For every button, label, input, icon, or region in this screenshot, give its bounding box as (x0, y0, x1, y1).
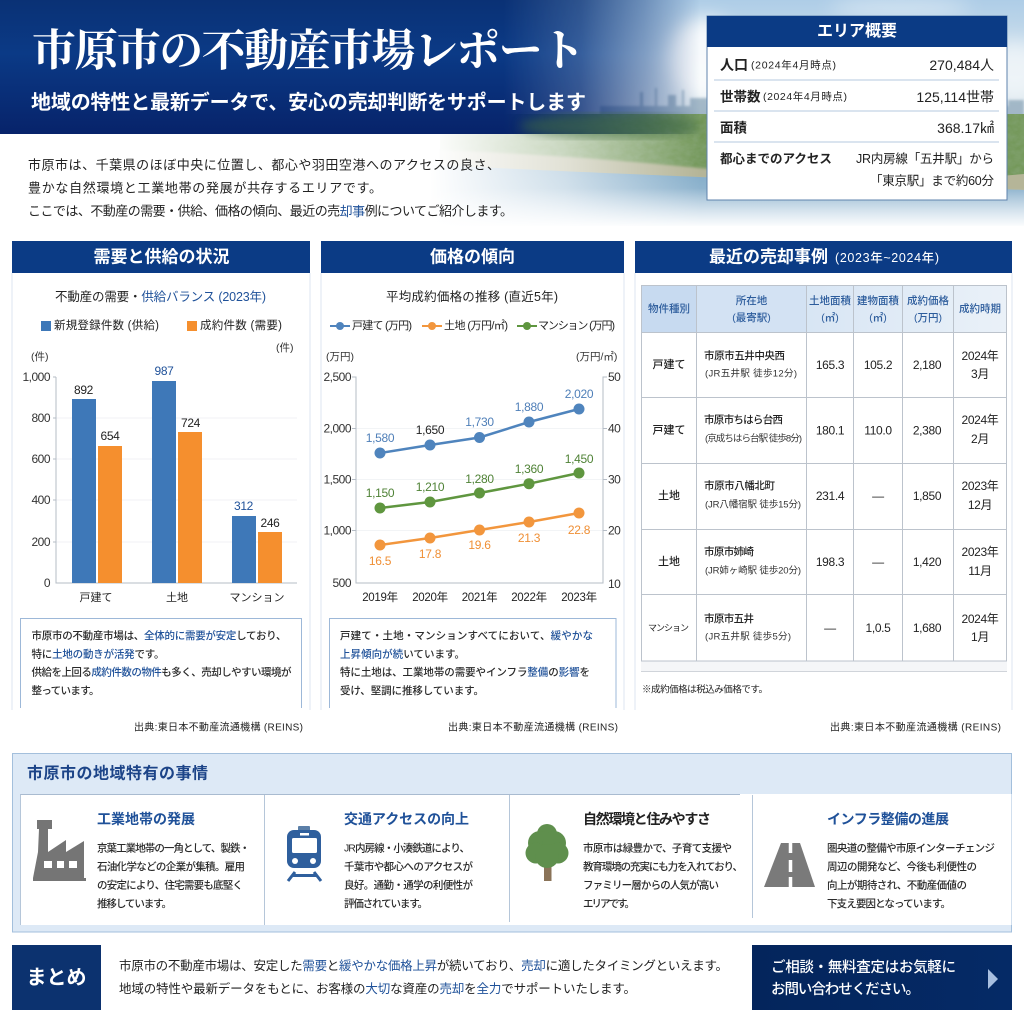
row 2: 2月 (971, 432, 989, 446)
bar chart: 724 (181, 416, 201, 430)
line chart: (万円) (326, 351, 354, 363)
table: (万円) (914, 312, 942, 324)
table: 物件種別 (648, 302, 690, 315)
row 3: 1,850 (913, 489, 942, 503)
row 5: 1,0.5 (866, 621, 891, 635)
title: 市原市の不動産市場レポート (32, 26, 585, 76)
line chart: 2022年 (511, 590, 547, 604)
panel: area overview: エリア概要 (817, 22, 897, 40)
line chart: 21.3 (518, 531, 541, 545)
legend: マンション (万円) (538, 320, 615, 332)
row 4: 土地 (658, 554, 680, 568)
panel: price trends (321, 241, 624, 734)
source: 出典:東日本不動産流通機構 (REINS) (448, 720, 618, 734)
icon: factory (33, 820, 86, 881)
row 4: 2023年 (962, 545, 999, 559)
legend (41, 318, 282, 332)
card: transit access: 千葉市や都心へのアクセスが (344, 860, 474, 873)
row 1: 市原市五井中央西 (704, 349, 785, 362)
table: 所在地 (736, 294, 768, 307)
row 4: 1,420 (913, 555, 942, 569)
card: natural environment: 教育環境の充実にも力を入れており、 (583, 860, 743, 873)
line chart: 1,210 (416, 480, 445, 494)
row 2: 市原市ちはら台西 (704, 413, 783, 426)
intro text: 市原市は、千葉県のほぼ中央に位置し、都心や羽田空港へのアクセスの良さ、 (28, 158, 500, 172)
bar chart: (件) (276, 342, 294, 354)
line chart: 10 (608, 577, 621, 591)
line chart: 30 (608, 472, 621, 486)
card: infrastructure (764, 811, 995, 910)
row 2: (京成ちはら台駅 徒歩8分) (705, 432, 802, 444)
bar chart: 戸建て (80, 591, 112, 604)
table (641, 285, 1007, 672)
row 3: 2023年 (962, 479, 999, 493)
summary text: 市原市の不動産市場は、安定した需要と緩やかな価格上昇が続いており、売却に適したタイミングといえます。 (119, 958, 728, 973)
row 2: 戸建て (652, 422, 686, 436)
table: (最寄駅) (732, 312, 771, 324)
bar chart: 200 (31, 535, 51, 549)
bar chart: 987 (155, 364, 174, 378)
bar chart: 400 (31, 493, 51, 507)
card: natural environment: エリアです。 (583, 898, 635, 910)
line chart: 2019年 (362, 590, 398, 604)
line chart: 17.8 (419, 547, 442, 561)
callout (20, 618, 302, 708)
card: infrastructure: 圏央道の整備や市原インターチェンジ (827, 842, 995, 854)
summary text: 地域の特性や最新データをもとに、お客様の大切な資産の売却を全力でサポートいたします。 (119, 981, 636, 996)
panel: area overview: JR内房線「五井駅」から (856, 151, 994, 166)
callout: 市原市の不動産市場は、全体的に需要が安定しており、 (32, 629, 286, 642)
table: 建物面積 (857, 294, 899, 307)
line chart: (万円/㎡) (576, 351, 617, 363)
summary text (119, 958, 728, 996)
panel: area overview: 人口 (720, 57, 748, 73)
heading: 需要と供給の状況 (94, 248, 230, 266)
row 2: 180.1 (816, 424, 845, 438)
line chart: 1,580 (366, 431, 395, 445)
legend: 戸建て (万円) (352, 319, 412, 332)
panel: area overview: 125,114世帯 (916, 89, 994, 105)
line chart: 2,000 (323, 422, 352, 436)
row 5: 1,680 (913, 621, 942, 635)
row 2 (652, 413, 999, 446)
card: infrastructure: インフラ整備の進展 (827, 811, 949, 827)
callout (330, 618, 616, 708)
icon: road (764, 843, 815, 887)
bar chart: 654 (101, 429, 120, 443)
bar chart: 600 (31, 452, 51, 466)
row 1: 3月 (971, 367, 989, 381)
card: industrial zone: 工業地帯の発展 (97, 811, 195, 827)
chart title: 平均成約価格の推移 (直近5年) (386, 289, 558, 304)
row 1 (652, 349, 999, 381)
card: infrastructure: 周辺の開発など、今後も利便性の (827, 860, 977, 873)
bar chart: 土地 (166, 591, 188, 604)
panel: supply and demand (12, 241, 310, 734)
row 1: 165.3 (816, 358, 845, 372)
row 4: 11月 (968, 564, 992, 578)
source: 出典:東日本不動産流通機構 (REINS) (830, 720, 1001, 734)
card: transit access: JR内房線・小湊鉄道により、 (344, 842, 470, 854)
table: 土地面積 (809, 294, 851, 307)
row 5: 1月 (971, 630, 989, 644)
panel: area overview: 368.17㎢ (937, 120, 994, 136)
row 2: 2024年 (962, 413, 999, 427)
bar chart: 0 (44, 576, 51, 590)
row 3: 市原市八幡北町 (704, 479, 776, 492)
card: natural environment (526, 811, 743, 910)
call to action: お問い合わせください。 (771, 981, 920, 998)
arrow (988, 969, 998, 989)
heading: 価格の傾向 (430, 248, 515, 266)
card: industrial zone (33, 811, 250, 910)
row 1: 2024年 (962, 349, 999, 363)
bar chart: 312 (234, 499, 254, 513)
row 5: マンション (648, 623, 689, 633)
line chart: 1,280 (465, 472, 494, 486)
panel: area overview: 「東京駅」まで約60分 (870, 173, 994, 188)
panel: regional circumstances (12, 754, 1012, 932)
row 5: 2024年 (962, 612, 999, 626)
row 5: (JR五井駅 徒歩5分) (705, 630, 791, 642)
row 4: — (872, 555, 884, 569)
card: industrial zone: 石油化学などの企業が集積。雇用 (97, 860, 245, 873)
row 3: 土地 (658, 488, 680, 502)
card: natural environment: 自然環境と住みやすさ (583, 811, 711, 827)
row 1: 105.2 (864, 358, 893, 372)
line chart: 20 (608, 524, 621, 538)
table: 成約価格 (907, 294, 949, 307)
panel: recent sales (635, 241, 1012, 734)
row 4 (658, 545, 999, 578)
row 1: (JR五井駅 徒歩12分) (705, 368, 797, 380)
card: industrial zone: 京葉工業地帯の一角として、製鉄・ (97, 842, 250, 854)
source: 出典:東日本不動産流通機構 (REINS) (134, 720, 303, 734)
row 3 (658, 479, 999, 512)
callout: 戸建て・土地・マンションすべてにおいて、緩やかな (340, 629, 593, 642)
card: infrastructure: 向上が期待され、不動産価値の (827, 878, 967, 892)
intro text: ここでは、不動産の需要・供給、価格の傾向、最近の売却事例についてご紹介します。 (28, 204, 513, 218)
line chart: 2,500 (323, 370, 352, 384)
intro text: 豊かな自然環境と工業地帯の発展が共存するエリアです。 (28, 180, 382, 196)
legend: 土地 (万円/㎡) (444, 319, 508, 332)
line chart: 1,650 (416, 423, 445, 437)
icon: train (287, 826, 321, 881)
line chart: 2023年 (561, 590, 597, 604)
panel: area overview: (2024年4月時点) (763, 90, 847, 103)
header banner (0, 0, 700, 146)
row 4: (JR姉ヶ崎駅 徒歩20分) (705, 564, 801, 576)
row 5: — (824, 621, 836, 635)
line chart: 1,730 (465, 415, 494, 429)
bar chart: (件) (31, 351, 48, 363)
table: 成約時期 (959, 302, 1001, 315)
line chart: 40 (608, 422, 621, 436)
panel: area overview: 世帯数 (720, 90, 761, 104)
card: transit access: 良好。通勤・通学の利便性が (344, 878, 474, 892)
call to action: ご相談・無料査定はお気軽に (771, 958, 956, 976)
row 4: 市原市姉崎 (704, 545, 754, 558)
bar chart: マンション (230, 592, 284, 604)
panel: area overview: 都心までのアクセス (720, 151, 832, 166)
row 5: 市原市五井 (704, 612, 754, 625)
bar chart: 892 (74, 383, 94, 397)
card: natural environment: 市原市は緑豊かで、子育て支援や (583, 842, 732, 854)
line chart: 19.6 (468, 538, 491, 552)
callout: 特に土地の動きが活発です。 (32, 648, 164, 660)
call to action (752, 945, 1012, 1010)
panel: area overview (707, 16, 1007, 200)
bar chart (22, 342, 297, 604)
panel: area overview: (2024年4月時点) (751, 58, 836, 72)
legend (330, 319, 615, 332)
line chart: 2020年 (412, 590, 448, 604)
line chart (323, 351, 621, 604)
line chart: 16.5 (369, 554, 392, 568)
row 1: 戸建て (652, 357, 686, 371)
row 4: 198.3 (816, 555, 845, 569)
heading (709, 246, 939, 266)
table note: ※成約価格は税込み価格です。 (642, 684, 768, 696)
row 3: (JR八幡宿駅 徒歩15分) (705, 498, 801, 510)
row 1: 2,180 (913, 358, 942, 372)
summary label (12, 945, 101, 1010)
line chart: 2021年 (462, 590, 497, 604)
legend: 成約件数 (需要) (200, 318, 282, 332)
line chart: 1,880 (515, 400, 544, 414)
callout: 受け、堅調に推移しています。 (340, 684, 484, 697)
line chart: 50 (608, 370, 621, 384)
subtitle: 地域の特性と最新データで、安心の売却判断をサポートします (31, 90, 586, 114)
line chart: 1,500 (323, 472, 352, 486)
bar chart: 1,000 (22, 370, 51, 384)
callout: 整っています。 (32, 684, 100, 697)
row 3: 231.4 (816, 489, 845, 503)
callout: 特に土地は、工業地帯の需要やインフラ整備の影響を (340, 666, 590, 678)
icon: tree (526, 824, 568, 881)
bar chart: 800 (31, 411, 51, 425)
row 3: 12月 (968, 498, 992, 512)
card: transit access (287, 811, 474, 910)
legend: 新規登録件数 (供給) (54, 318, 159, 332)
row 5 (648, 612, 999, 644)
callout: 供給を上回る成約件数の物件も多く、売却しやすい環境が (32, 666, 292, 678)
line chart: 1,360 (515, 462, 544, 476)
line chart: 1,450 (565, 452, 594, 466)
line chart: 500 (332, 576, 352, 590)
table: (㎡) (821, 312, 839, 324)
bar chart: 246 (261, 516, 280, 530)
row 2: 110.0 (864, 424, 892, 438)
callout: 上昇傾向が続いています。 (340, 648, 465, 660)
line chart: 22.8 (568, 523, 591, 537)
line chart: 1,150 (366, 486, 395, 500)
card: transit access: 交通アクセスの向上 (344, 811, 469, 827)
card: infrastructure: 下支え要因となっています。 (827, 897, 951, 910)
photo: city and river landscape (0, 0, 1024, 228)
card: natural environment: ファミリー層からの人気が高い (583, 878, 719, 892)
heading: (2023年~2024年) (835, 251, 939, 265)
card: industrial zone: 推移しています。 (97, 897, 172, 910)
chart title: 不動産の需要・供給バランス (2023年) (55, 290, 266, 304)
intro text (28, 158, 513, 218)
heading: 最近の売却事例 (709, 246, 828, 266)
line chart: 1,000 (323, 524, 352, 538)
row 3: — (872, 489, 884, 503)
summary label: まとめ (26, 967, 86, 989)
table: (㎡) (869, 312, 887, 324)
card: industrial zone: の安定により、住宅需要も底堅く (97, 878, 243, 892)
line chart: 2,020 (565, 387, 594, 401)
panel: area overview: 面積 (720, 120, 748, 136)
card: transit access: 評価されています。 (344, 897, 428, 910)
section heading: 市原市の地域特有の事情 (27, 764, 208, 782)
panel: area overview: 270,484人 (929, 57, 994, 73)
row 2: 2,380 (913, 424, 942, 438)
